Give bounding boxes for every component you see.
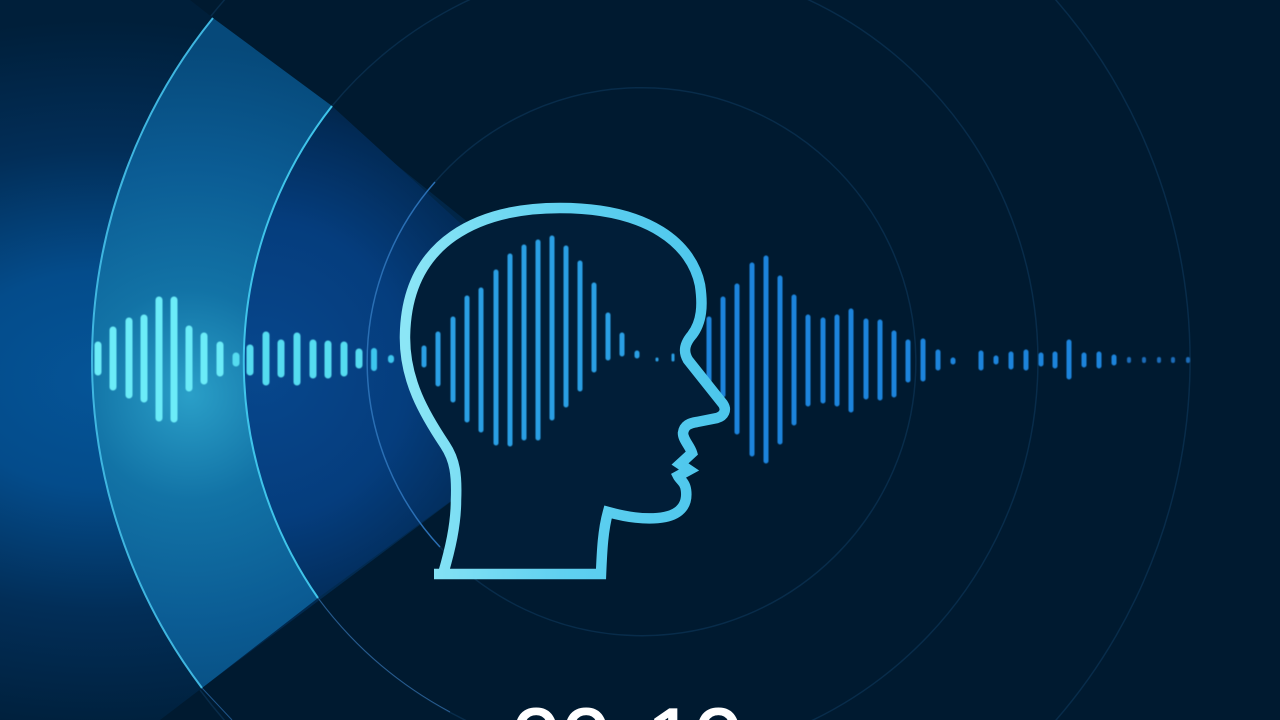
concentric rings [200, 0, 1190, 720]
waveform: left segment [98, 300, 391, 419]
head fill [405, 208, 725, 574]
waveform: right segment [709, 258, 1188, 461]
head outline [405, 208, 725, 574]
inner blue sector [244, 106, 470, 598]
highlighted arcs [92, 18, 440, 688]
waveform: bars inside head [424, 238, 685, 444]
left blue glow [0, 0, 467, 720]
head and waveform [98, 208, 1188, 574]
highlighted ring band [92, 18, 332, 688]
